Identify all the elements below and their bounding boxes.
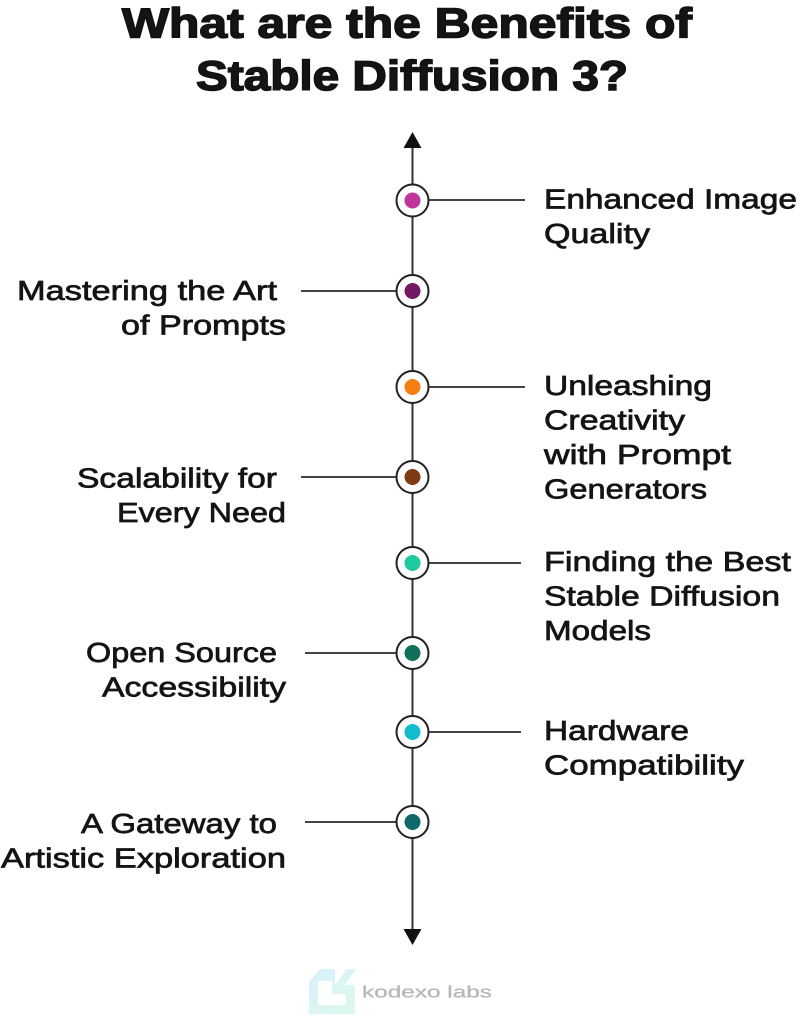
label: Unleashing Creativity with Prompt Generators: Creativity xyxy=(544,404,685,436)
label: Mastering the Art of Prompts: of Prompts xyxy=(121,310,286,340)
logo: kodexo labs xyxy=(309,969,492,1014)
node: Mastering the Art of Prompts xyxy=(396,275,428,307)
label: A Gateway to Artistic Exploration: Artistic Exploration xyxy=(1,842,286,874)
node: Unleashing Creativity xyxy=(396,371,428,403)
label: Scalability for Every Need: Every Need xyxy=(117,497,286,528)
label: A Gateway to Artistic Exploration xyxy=(1,808,286,874)
label: Finding the Best Stable Diffusion Models: Finding the Best xyxy=(544,546,791,577)
node: Scalability xyxy=(396,461,428,493)
label: Finding the Best Stable Diffusion Models: Stable Diffusion xyxy=(544,580,780,612)
label: Open Source Accessibility: Accessibility xyxy=(102,672,286,702)
label: Hardware Compatibility: Hardware xyxy=(544,715,689,746)
label: Finding the Best Stable Diffusion Models xyxy=(544,546,791,646)
node: Open Source xyxy=(396,637,428,669)
label: Mastering the Art of Prompts xyxy=(17,275,286,340)
title: What are the Benefits of xyxy=(122,0,693,46)
label: Open Source Accessibility: Open Source xyxy=(86,637,277,668)
label: Open Source Accessibility xyxy=(86,637,286,702)
icon: down arrow xyxy=(404,929,422,945)
icon: up arrow xyxy=(404,132,422,148)
title xyxy=(122,0,693,99)
label: Scalability for Every Need xyxy=(77,462,286,528)
label: Enhanced Image Quality: Quality xyxy=(544,218,650,249)
node: Gateway xyxy=(396,806,428,838)
timeline axis with arrows xyxy=(404,132,422,931)
label: Finding the Best Stable Diffusion Models: Models xyxy=(544,615,651,646)
connector lines xyxy=(301,200,525,822)
node: Enhanced Image Quality xyxy=(396,184,428,216)
label: A Gateway to Artistic Exploration: A Gateway to xyxy=(81,808,277,839)
label: Enhanced Image Quality xyxy=(544,184,797,249)
title: Stable Diffusion 3? xyxy=(196,52,628,99)
node: Hardware Compatibility xyxy=(396,716,428,748)
icon: logo mark xyxy=(309,969,356,1014)
logo wordmark: kodexo labs xyxy=(362,982,492,1002)
label: Unleashing Creativity with Prompt Generators xyxy=(543,370,731,504)
label: Unleashing Creativity with Prompt Generators: Unleashing xyxy=(544,370,712,401)
label: Mastering the Art of Prompts: Mastering the Art xyxy=(17,275,277,306)
label: Unleashing Creativity with Prompt Generators: with Prompt xyxy=(543,439,731,470)
label: Unleashing Creativity with Prompt Generators: Generators xyxy=(544,474,707,504)
label: Enhanced Image Quality: Enhanced Image xyxy=(544,184,797,214)
label: Hardware Compatibility: Compatibility xyxy=(544,750,744,780)
label: Scalability for Every Need: Scalability for xyxy=(77,462,277,494)
node: Finding the Best Models xyxy=(396,547,428,579)
label: Hardware Compatibility xyxy=(544,715,744,780)
